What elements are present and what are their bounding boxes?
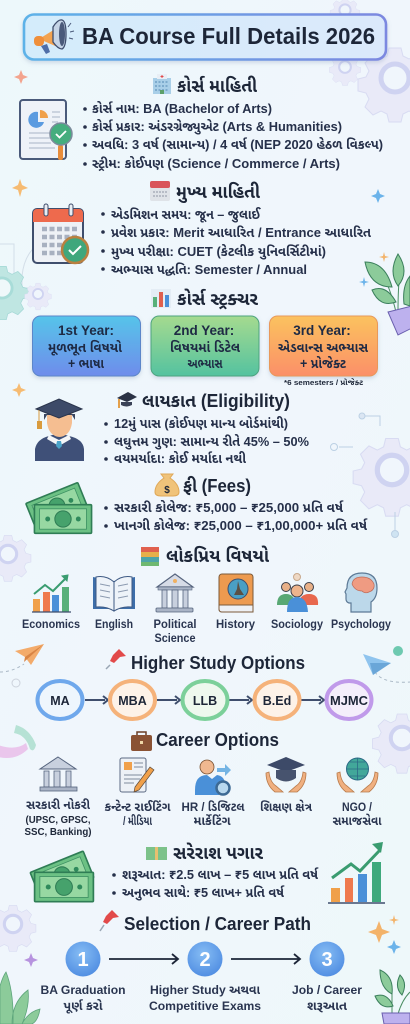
step 1: પૂર્ણ કરો bbox=[64, 999, 103, 1014]
flow: degree options: LLB bbox=[193, 694, 217, 708]
step 1 bbox=[40, 942, 126, 1014]
bullet list: salary: શરૂઆત: ₹2.5 લાખ – ₹5 લાખ પ્રતિ વર્ષ bbox=[122, 867, 319, 882]
card: 3rd year bbox=[270, 316, 378, 376]
flow: degree options: MA bbox=[50, 694, 70, 708]
subject: political science: Political bbox=[154, 617, 196, 631]
career: content writing bbox=[104, 758, 171, 828]
panel: average salary bbox=[30, 842, 385, 903]
career: education bbox=[260, 757, 312, 814]
subject: political science: Science bbox=[154, 631, 196, 645]
panel: career options bbox=[24, 729, 382, 838]
step 2 bbox=[149, 942, 261, 1013]
step 3: Job / Career bbox=[292, 983, 362, 997]
bullet list: course information: કોર્સ પ્રકાર: અંડરગ્રેજ્યુએટ (Arts & Humanities) bbox=[92, 118, 342, 135]
card: 1st year: મૂળભૂત વિષયો bbox=[48, 339, 122, 356]
career: NGO and social service: સમાજસેવા bbox=[332, 814, 382, 828]
decoration: potted plant bbox=[365, 254, 410, 335]
bullet list: fees: ખાનગી કોલેજ: ₹25,000 – ₹1,00,000+ પ્રતિ વર્ષ bbox=[114, 517, 368, 533]
panel: selection and career path bbox=[40, 910, 362, 1014]
icon: money bag bbox=[155, 474, 179, 496]
subject: sociology: Sociology bbox=[271, 617, 323, 631]
bullet list: course information bbox=[83, 101, 383, 172]
panel: key information bbox=[33, 181, 372, 277]
career: government job: (UPSC, GPSC, bbox=[26, 814, 91, 826]
decoration: corner plants bbox=[0, 970, 410, 1024]
bullet list: eligibility: 12મું પાસ (કોઈપણ માન્ય બોર્ડમાંથી) bbox=[114, 416, 288, 432]
card: 2nd year: 2nd Year: bbox=[174, 323, 234, 338]
career: NGO and social service bbox=[332, 758, 382, 828]
icon: banknote emoji bbox=[146, 847, 167, 860]
career: content writing: / મીડિયા bbox=[123, 814, 152, 828]
career: education: શિક્ષણ ક્ષેત્ર bbox=[260, 800, 312, 814]
heading: selection path: Selection / Career Path bbox=[124, 913, 311, 934]
card: 3rd year: એડવાન્સ અભ્યાસ bbox=[278, 340, 369, 355]
subject: economics: Economics bbox=[22, 617, 80, 631]
panel: fees bbox=[26, 474, 368, 533]
career: NGO and social service: NGO / bbox=[342, 800, 373, 814]
bullet list: key information: મુખ્ય પરીક્ષા: CUET (કેટલીક યુનિવર્સિટીમાં) bbox=[111, 243, 326, 260]
bullet list: eligibility bbox=[104, 416, 309, 466]
subject: economics bbox=[22, 575, 80, 631]
bullet list: key information: પ્રવેશ પ્રકાર: Merit આધારિત / Entrance આધારિત bbox=[111, 224, 372, 240]
step 1: 1 bbox=[77, 949, 89, 971]
bullet list: salary: અનુભવ સાથે: ₹5 લાખ+ પ્રતિ વર્ષ bbox=[122, 884, 285, 901]
card: 2nd year bbox=[151, 316, 259, 376]
subject: sociology bbox=[271, 574, 323, 631]
step 3: 3 bbox=[321, 949, 333, 971]
decoration: circuit lines bbox=[330, 413, 398, 538]
subject: political science bbox=[154, 574, 196, 645]
title banner bbox=[24, 14, 386, 60]
icon: money bag: $ bbox=[164, 485, 170, 496]
bullet list: eligibility: વયમર્યાદા: કોઈ મર્યાદા નથી bbox=[114, 451, 246, 466]
flow: degree options bbox=[38, 681, 372, 719]
icon: books bbox=[141, 547, 159, 566]
heading: career options: Career Options bbox=[156, 729, 279, 750]
career: government job bbox=[24, 757, 92, 838]
panel: higher study options bbox=[38, 649, 372, 719]
subject: psychology: Psychology bbox=[331, 617, 391, 631]
card: 1st year bbox=[32, 316, 140, 376]
subject: english: English bbox=[95, 617, 133, 631]
step 2: Competitive Exams bbox=[149, 999, 261, 1013]
icon: megaphone bbox=[34, 20, 74, 54]
icon: rising bar chart bbox=[328, 842, 385, 903]
flow: degree options: MBA bbox=[118, 694, 147, 708]
panel: popular subjects bbox=[22, 545, 391, 645]
arrow: step 1 to 2 bbox=[109, 954, 178, 964]
heading: average salary: સરેરાશ પગાર bbox=[173, 842, 263, 863]
icon: bar chart emoji bbox=[151, 289, 171, 308]
bullet list: course information: સ્ટ્રીમ: કોઈપણ (Science / Commerce / Arts) bbox=[92, 156, 340, 172]
card: 3rd year: 3rd Year: bbox=[293, 323, 351, 338]
bullet list: fees bbox=[104, 499, 368, 533]
card: 1st year: 1st Year: bbox=[58, 323, 114, 338]
heading: fees: ફી (Fees) bbox=[183, 475, 251, 496]
step 2: Higher Study અથવા bbox=[150, 983, 260, 997]
panel: eligibility bbox=[35, 391, 309, 466]
heading: course information: કોર્સ માહિતી bbox=[177, 75, 258, 96]
career: government job: SSC, Banking) bbox=[24, 826, 92, 838]
icon: report with magnifier bbox=[20, 100, 72, 160]
bullet list: key information: અભ્યાસ પદ્ધતિ: Semester / Annual bbox=[111, 262, 307, 277]
bullet list: salary bbox=[112, 867, 319, 901]
card: 2nd year: વિષયમાં ડિટેલ bbox=[170, 339, 241, 355]
career: HR and digital marketing: HR / ડિજિટલ bbox=[182, 800, 245, 814]
icon: small graduation cap bbox=[117, 392, 137, 408]
card: 3rd year: + પ્રોજેક્ટ bbox=[300, 355, 346, 371]
icon: briefcase bbox=[131, 732, 152, 751]
panel: course structure bbox=[32, 288, 378, 387]
bullet list: course information: કોર્સ નામ: BA (Bachelor of Arts) bbox=[92, 101, 272, 116]
bullet list: key information bbox=[101, 207, 372, 277]
panel: course information bbox=[20, 74, 383, 172]
icon: banknotes bbox=[26, 483, 92, 533]
career: content writing: કન્ટેન્ટ રાઈટિંગ bbox=[104, 800, 171, 814]
step 3: શરૂઆત bbox=[307, 999, 348, 1013]
heading: key information: મુખ્ય માહિતી bbox=[176, 181, 261, 203]
career: government job: સરકારી નોકરી bbox=[26, 798, 90, 812]
icon: blue paper plane bbox=[363, 654, 391, 675]
heading: eligibility: લાયકાત (Eligibility) bbox=[142, 391, 290, 411]
step 2: 2 bbox=[199, 949, 211, 971]
step 3 bbox=[292, 942, 362, 1013]
arrow: step 2 to 3 bbox=[231, 954, 300, 964]
icon: graduate student bbox=[35, 399, 84, 461]
bullet list: fees: સરકારી કોલેજ: ₹5,000 – ₹25,000 પ્રતિ વર્ષ bbox=[114, 499, 344, 515]
subject: history bbox=[216, 574, 255, 631]
step 1: BA Graduation bbox=[40, 983, 126, 997]
icon: pushpin bbox=[106, 649, 126, 669]
card: 2nd year: અભ્યાસ bbox=[188, 356, 223, 371]
icon: banknotes bbox=[30, 851, 94, 902]
icon: orange paper plane bbox=[15, 644, 44, 665]
icon: hospital building bbox=[153, 74, 171, 94]
heading: higher study options: Higher Study Options bbox=[131, 652, 305, 673]
bullet list: course information: અવધિ: 3 વર્ષ (સામાન્ય) / 4 વર્ષ (NEP 2020 હેઠળ વિકલ્પ) bbox=[92, 136, 383, 152]
career: HR and digital marketing bbox=[182, 760, 245, 828]
footnote: *6 semesters / પ્રોજેક્ટ bbox=[284, 378, 363, 387]
icon: pushpin bbox=[100, 910, 119, 931]
title text: BA Course Full Details 2026 bbox=[82, 23, 375, 49]
bullet list: eligibility: લઘુત્તમ ગુણ: સામાન્ય રીતે 45% – 50% bbox=[114, 433, 309, 450]
icon: calendar with check bbox=[33, 204, 88, 263]
subject: english bbox=[93, 577, 135, 631]
heading: course structure: કોર્સ સ્ટ્રક્ચર bbox=[177, 288, 258, 310]
bullet list: key information: એડમિશન સમય: જૂન – જુલાઈ bbox=[111, 207, 261, 223]
subject: psychology bbox=[331, 573, 391, 631]
flow: degree options: B.Ed bbox=[263, 694, 291, 708]
career: HR and digital marketing: માર્કેટિંગ bbox=[194, 814, 231, 828]
heading: popular subjects: લોકપ્રિય વિષયો bbox=[166, 545, 270, 566]
subject: history: History bbox=[216, 617, 255, 631]
card: 1st year: + ભાષા bbox=[68, 356, 104, 371]
flow: degree options: MJMC bbox=[330, 694, 368, 708]
icon: small calendar bbox=[150, 181, 170, 201]
